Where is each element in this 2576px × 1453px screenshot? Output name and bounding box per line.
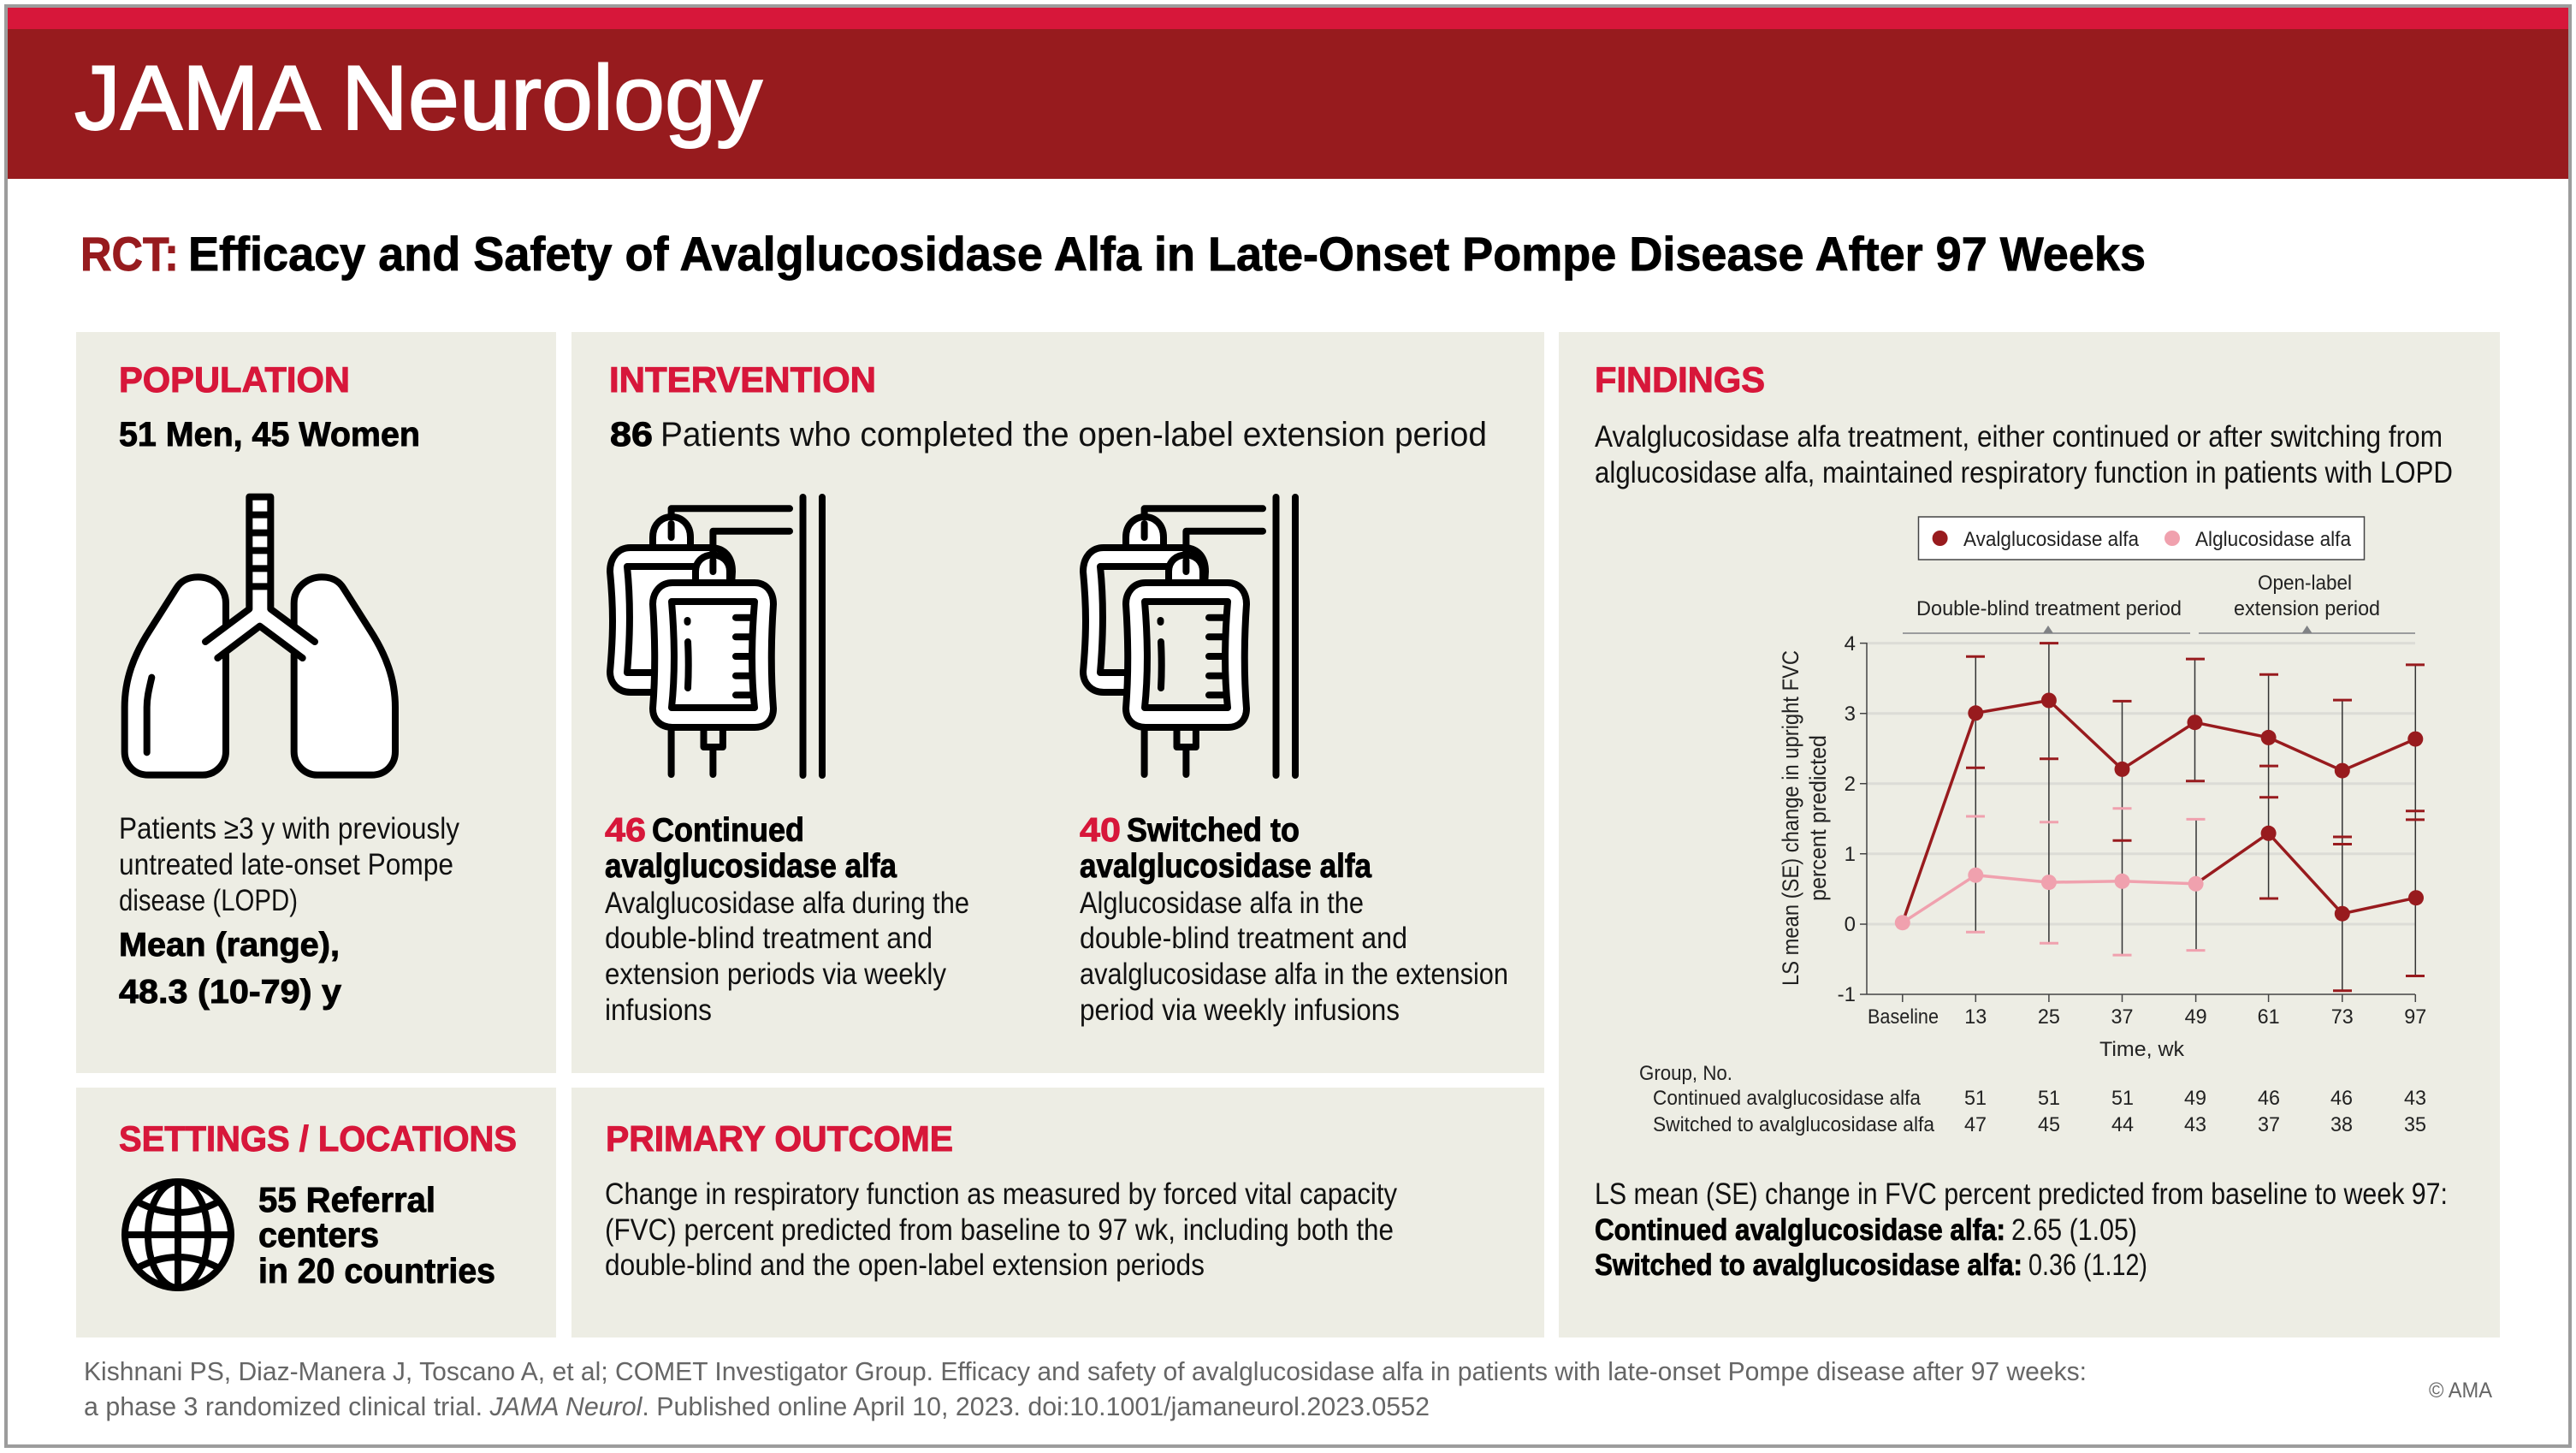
- settings text: centers: [258, 1215, 379, 1254]
- mean age: Mean (range),: [119, 927, 340, 964]
- panel: intervention: [571, 332, 1544, 1073]
- citation: a phase 3 randomized clinical trial. JAMA Neurol. Published online April 10, 2023. doi:10.1001/jamaneurol.2023.0552: [84, 1391, 1430, 1421]
- number-at-risk table: 49: [2184, 1087, 2206, 1110]
- x axis labels: 73: [2331, 1005, 2354, 1029]
- continued arm text: avalglucosidase alfa: [605, 848, 897, 885]
- primary outcome text: [605, 1177, 1397, 1282]
- number-at-risk table: 43: [2404, 1087, 2426, 1110]
- findings results: 0.36 (1.12): [2028, 1248, 2147, 1282]
- heading: settings: SETTINGS / LOCATIONS: [119, 1118, 517, 1159]
- number-at-risk table: 45: [2038, 1113, 2060, 1136]
- x axis labels: 25: [2038, 1005, 2060, 1029]
- journal name: JAMA Neurology: [74, 46, 762, 149]
- number-at-risk table: Continued avalglucosidase alfa: [1653, 1087, 1922, 1110]
- panel: settings / locations: [76, 1088, 556, 1337]
- number-at-risk table: 37: [2258, 1113, 2280, 1136]
- population count: 51 Men, 45 Women: [119, 416, 420, 454]
- y axis labels: 2: [1845, 773, 1856, 796]
- settings text: in 20 countries: [258, 1251, 495, 1290]
- copyright: © AMA: [2429, 1379, 2492, 1403]
- continued arm text: [605, 812, 969, 1027]
- main title: Efficacy and Safety of Avalglucosidase Alfa in Late-Onset Pompe Disease After 97 Weeks: [188, 227, 2146, 281]
- icon: IV bags, switched arm: [1083, 497, 1295, 775]
- findings summary: [1595, 420, 2453, 489]
- x axis labels: Time, wk: [2099, 1038, 2185, 1061]
- chart legend: [1918, 517, 2365, 560]
- switched arm text: Switched to: [1127, 812, 1300, 849]
- switched arm text: avalglucosidase alfa: [1080, 848, 1371, 885]
- chart legend: Avalglucosidase alfa: [1963, 528, 2140, 551]
- y axis labels: 4: [1845, 632, 1856, 655]
- heading: findings: FINDINGS: [1595, 359, 1765, 400]
- y axis labels: LS mean (SE) change in upright FVC: [1778, 650, 1803, 986]
- icon: globe: [125, 1182, 231, 1288]
- citation: [84, 1356, 2087, 1421]
- citation: Kishnani PS, Diaz-Manera J, Toscano A, et al; COMET Investigator Group. Efficacy and safety of avalglucosidase alfa in patients with late-onset Pompe disease after 97 weeks:: [84, 1356, 2087, 1386]
- settings text: [258, 1180, 495, 1290]
- x axis labels: [1868, 1005, 2426, 1061]
- period brackets: [1903, 572, 2415, 633]
- number-at-risk table: 44: [2111, 1113, 2134, 1136]
- population description: Patients ≥3 y with previously: [119, 812, 459, 845]
- settings text: 55 Referral: [258, 1180, 435, 1219]
- icon: lungs: [125, 497, 395, 775]
- y axis labels: 0: [1845, 913, 1856, 936]
- x axis labels: 37: [2111, 1005, 2134, 1029]
- y axis labels: 1: [1845, 843, 1856, 866]
- switched arm text: avalglucosidase alfa in the extension: [1080, 958, 1508, 991]
- panel: primary outcome: [571, 1088, 1544, 1337]
- switched arm text: 40: [1080, 812, 1121, 849]
- population description: [119, 812, 459, 917]
- mean age: [119, 927, 341, 1011]
- heading: population: POPULATION: [119, 359, 350, 400]
- main title: RCT:: [80, 227, 179, 281]
- x axis labels: 13: [1964, 1005, 1987, 1029]
- y axis labels: percent predicted: [1805, 735, 1831, 901]
- heading: intervention: INTERVENTION: [609, 359, 876, 400]
- mean age: 48.3 (10-79) y: [119, 974, 341, 1011]
- x axis labels: Baseline: [1868, 1005, 1939, 1029]
- number-at-risk table: 38: [2330, 1113, 2353, 1136]
- number-at-risk table: Group, No.: [1639, 1062, 1732, 1085]
- findings results: 2.65 (1.05): [2011, 1213, 2137, 1247]
- error bars: [1966, 643, 2425, 991]
- number-at-risk table: 46: [2258, 1087, 2280, 1110]
- series: switched to avalglucosidase alfa: [1895, 826, 2424, 930]
- findings results: Continued avalglucosidase alfa:: [1595, 1213, 2005, 1247]
- continued arm text: Avalglucosidase alfa during the: [605, 887, 969, 920]
- primary outcome text: double-blind and the open-label extension periods: [605, 1248, 1205, 1282]
- switched arm text: double-blind treatment and: [1080, 922, 1407, 955]
- number-at-risk table: 51: [1964, 1087, 1987, 1110]
- y axis labels: 3: [1845, 703, 1856, 726]
- series: continued avalglucosidase alfa: [1903, 693, 2423, 922]
- y axis labels: -1: [1838, 983, 1856, 1006]
- heading: primary outcome: PRIMARY OUTCOME: [606, 1118, 953, 1159]
- findings results: Switched to avalglucosidase alfa:: [1595, 1248, 2022, 1282]
- number-at-risk table: 51: [2111, 1087, 2134, 1110]
- number-at-risk table: [1639, 1062, 2426, 1136]
- number-at-risk table: 35: [2404, 1113, 2426, 1136]
- primary outcome text: (FVC) percent predicted from baseline to 97 wk, including both the: [605, 1213, 1394, 1247]
- number-at-risk table: 46: [2330, 1087, 2353, 1110]
- primary outcome text: Change in respiratory function as measured by forced vital capacity: [605, 1177, 1397, 1211]
- x axis labels: 49: [2185, 1005, 2207, 1029]
- continued arm text: double-blind treatment and: [605, 922, 933, 955]
- header band: [8, 8, 2568, 179]
- x axis labels: 97: [2404, 1005, 2426, 1029]
- period brackets: Double-blind treatment period: [1916, 597, 2182, 620]
- period brackets: Open-label: [2258, 572, 2352, 595]
- number-at-risk table: 43: [2184, 1113, 2206, 1136]
- y axis labels: [1778, 632, 1856, 1006]
- icon: IV bags, continued arm: [610, 497, 822, 775]
- x axis labels: 61: [2258, 1005, 2280, 1029]
- findings summary: Avalglucosidase alfa treatment, either continued or after switching from: [1595, 420, 2443, 454]
- findings summary: alglucosidase alfa, maintained respiratory function in patients with LOPD: [1595, 456, 2453, 489]
- switched arm text: period via weekly infusions: [1080, 993, 1400, 1027]
- findings results: [1595, 1177, 2448, 1282]
- continued arm text: extension periods via weekly: [605, 958, 946, 991]
- number-at-risk table: Switched to avalglucosidase alfa: [1653, 1113, 1935, 1136]
- intervention count: Patients who completed the open-label extension period: [660, 416, 1487, 454]
- continued arm text: infusions: [605, 993, 712, 1027]
- line chart: LS mean change in FVC: [1778, 632, 2426, 1061]
- continued arm text: 46: [605, 812, 646, 849]
- chart legend: Alglucosidase alfa: [2195, 528, 2352, 551]
- continued arm text: Continued: [652, 812, 804, 849]
- population description: untreated late-onset Pompe: [119, 848, 453, 881]
- number-at-risk table: 47: [1964, 1113, 1987, 1136]
- panel: findings: [1559, 332, 2500, 1337]
- switched arm text: [1080, 812, 1508, 1027]
- intervention count: 86: [610, 416, 653, 454]
- period brackets: extension period: [2234, 597, 2380, 620]
- findings results: LS mean (SE) change in FVC percent predicted from baseline to week 97:: [1595, 1177, 2448, 1211]
- number-at-risk table: 51: [2038, 1087, 2060, 1110]
- population description: disease (LOPD): [119, 884, 298, 917]
- panel: population: [76, 332, 556, 1073]
- switched arm text: Alglucosidase alfa in the: [1080, 887, 1364, 920]
